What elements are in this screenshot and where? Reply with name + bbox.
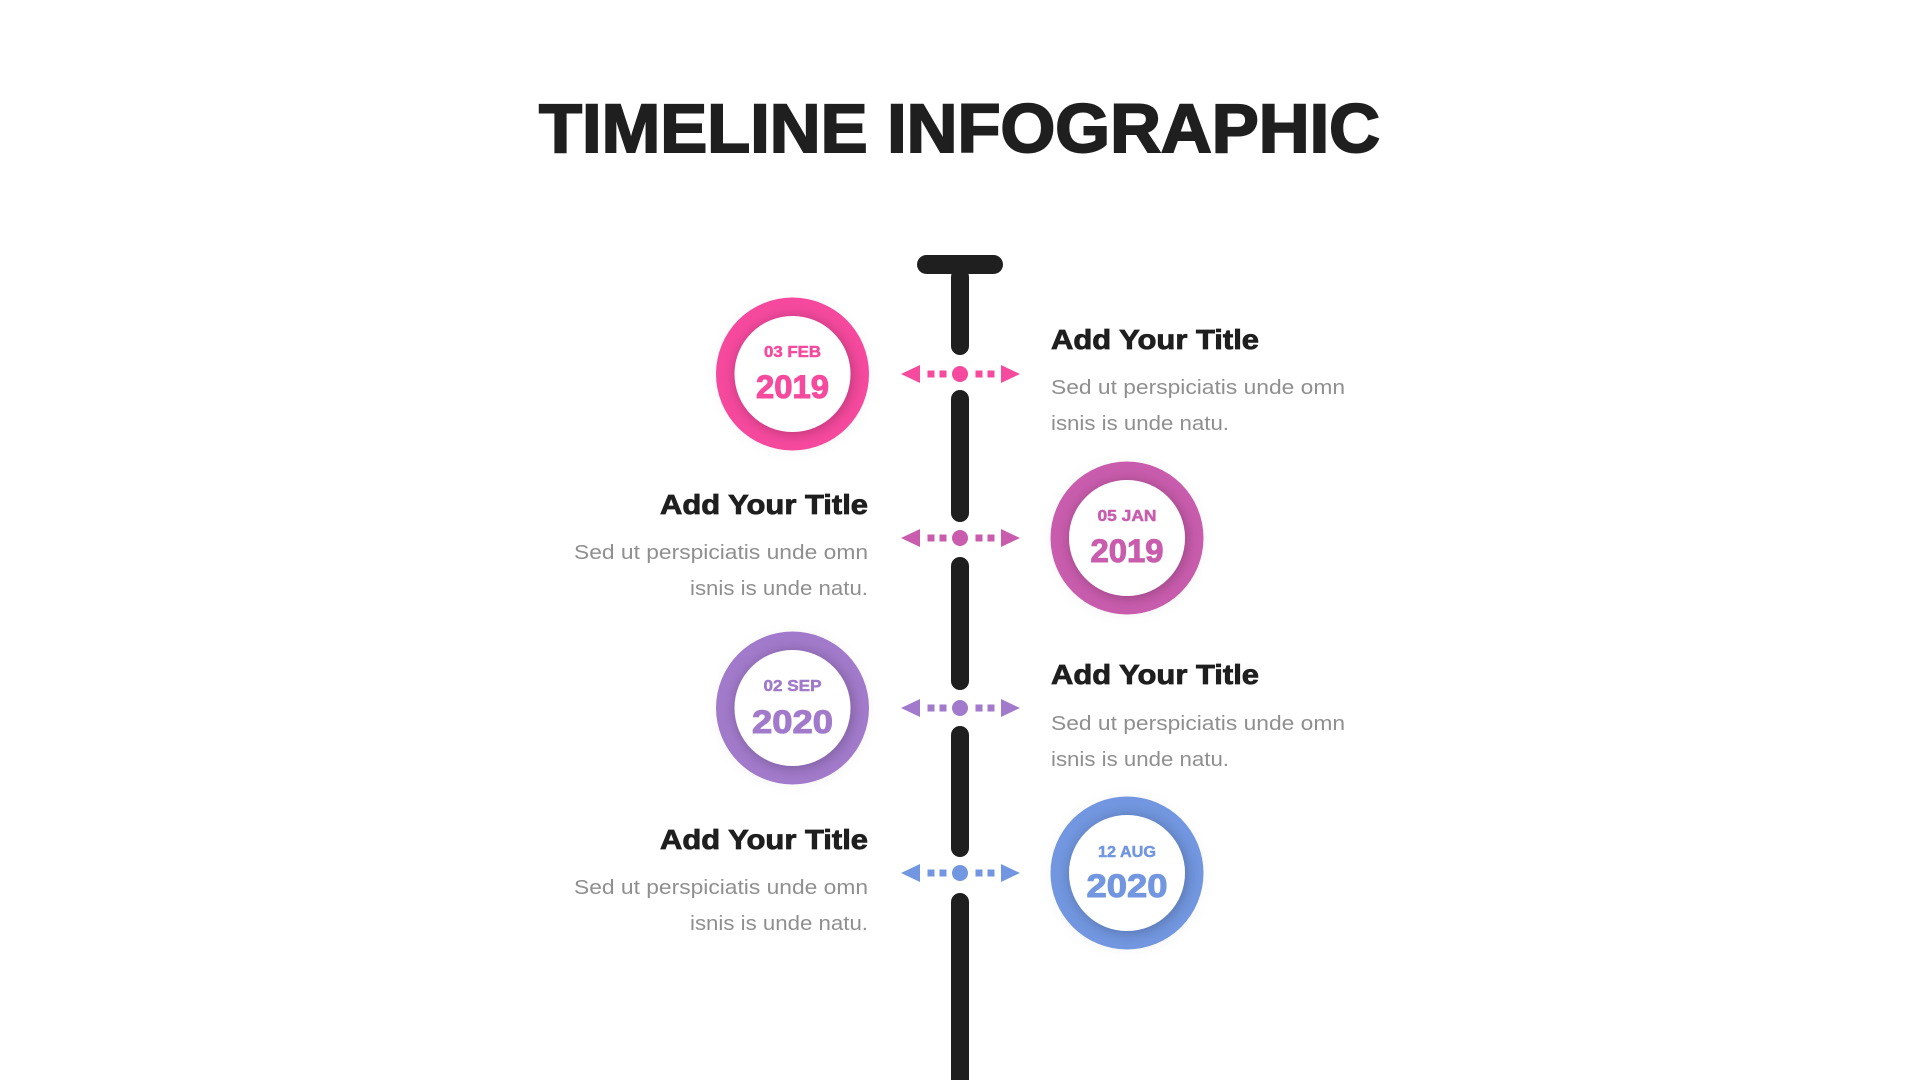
date badge: 05 JAN 2019: 05 JAN xyxy=(1098,508,1156,525)
text block: row 2 left: Add Your Title xyxy=(660,489,868,520)
connector: row 4 xyxy=(901,864,1020,882)
text block: row 3 right: Add Your Title xyxy=(1051,659,1259,690)
text block: row 2 left xyxy=(574,489,868,600)
text block: row 4 left: Sed ut perspiciatis unde omn xyxy=(574,877,868,899)
date badge: 02 SEP 2020 xyxy=(716,632,869,784)
date badge: 03 FEB 2019 xyxy=(716,298,869,450)
text block: row 3 right: Sed ut perspiciatis unde omn xyxy=(1051,713,1345,735)
date badge: 12 AUG 2020 xyxy=(1050,796,1204,950)
date badge: 03 FEB 2019: 2019 xyxy=(756,369,829,405)
text block: row 2 left: Sed ut perspiciatis unde omn xyxy=(574,542,868,564)
text block: row 1 right: isnis is unde natu. xyxy=(1051,413,1229,435)
text block: row 2 left: isnis is unde natu. xyxy=(690,578,868,600)
text block: row 4 left: isnis is unde natu. xyxy=(690,913,868,935)
connector: row 2 xyxy=(901,529,1020,547)
text block: row 3 right xyxy=(1051,659,1345,771)
text block: row 1 right: Add Your Title xyxy=(1051,324,1259,355)
text block: row 1 right: Sed ut perspiciatis unde omn xyxy=(1051,377,1345,399)
date badge: 05 JAN 2019: 2019 xyxy=(1090,533,1164,569)
date badge: 12 AUG 2020: 2020 xyxy=(1086,868,1168,904)
title: TIMELINE INFOGRAPHIC xyxy=(539,90,1380,167)
date badge: 02 SEP 2020: 2020 xyxy=(752,704,833,740)
text block: row 1 right xyxy=(1051,324,1345,435)
timeline spine xyxy=(917,255,1003,1080)
text block: row 3 right: isnis is unde natu. xyxy=(1051,749,1229,771)
date badge: 02 SEP 2020: 02 SEP xyxy=(764,678,822,695)
date badge: 05 JAN 2019 xyxy=(1050,462,1204,614)
date badge: 03 FEB 2019: 03 FEB xyxy=(764,344,821,361)
text block: row 4 left: Add Your Title xyxy=(660,824,868,855)
connector: row 3 xyxy=(901,699,1020,717)
connector: row 1 xyxy=(901,365,1020,383)
text block: row 4 left xyxy=(574,824,868,935)
date badge: 12 AUG 2020: 12 AUG xyxy=(1098,844,1156,861)
